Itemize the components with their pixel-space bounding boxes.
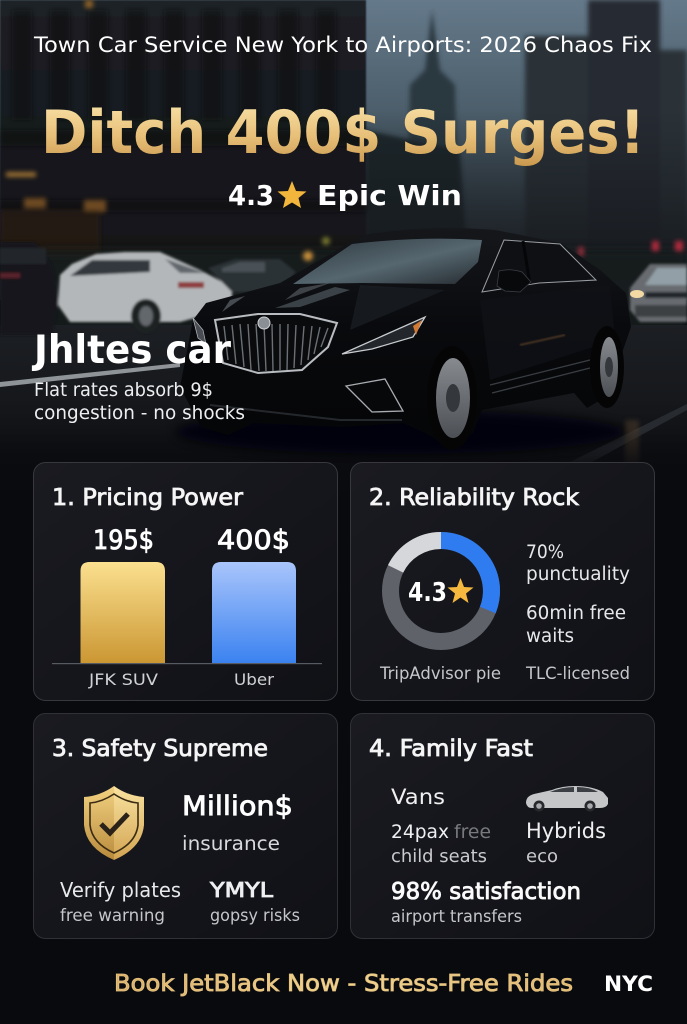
bar chart (52, 525, 322, 689)
vans detail: free (454, 821, 491, 843)
bar chart: JFK SUV (88, 670, 158, 689)
headline: Ditch 400$ Surges! (41, 98, 645, 168)
icon: silver car (526, 786, 608, 812)
chart caption: TripAdvisor pie (379, 664, 501, 683)
background cars (0, 242, 687, 335)
donut chart: 4.3 (408, 578, 447, 608)
YMYL note: gopsy risks (210, 906, 300, 926)
rating subheadline (228, 179, 462, 212)
vans label: Vans (391, 785, 445, 810)
hero description: Flat rates absorb 9$ (34, 379, 213, 401)
reliability stats: 70% (526, 542, 564, 563)
lower bumper (210, 405, 402, 420)
headlight (342, 317, 425, 354)
panel heading: 3. Safety Supreme (52, 736, 268, 762)
reliability stats: waits (526, 626, 574, 647)
vans detail (391, 821, 491, 867)
windshield (293, 239, 482, 284)
verify plates note: free warning (60, 906, 165, 926)
reliability stats: 60min free (526, 603, 626, 624)
YMYL note (209, 878, 300, 926)
panel heading: 2. Reliability Rock (369, 485, 580, 511)
hero car: black sedan (175, 228, 631, 454)
rating subheadline: Epic Win (317, 179, 462, 212)
verify plates note: Verify plates (60, 878, 181, 902)
side windows (482, 240, 596, 292)
panel: pricing power (34, 462, 338, 700)
side mirror (497, 270, 531, 292)
verify plates note (60, 878, 181, 926)
hybrids detail (526, 819, 606, 867)
hero heading: Jhltes car (31, 328, 232, 373)
satisfaction stat (391, 879, 581, 927)
panel: safety supreme (34, 714, 338, 938)
grille (215, 314, 337, 373)
hybrids detail: Hybrids (526, 819, 606, 843)
vans detail: child seats (391, 846, 487, 867)
rear wheel (590, 326, 624, 408)
hybrids detail: eco (526, 846, 558, 867)
title: Town Car Service New York to Airports: 2026 Chaos Fix (33, 33, 652, 57)
satisfaction stat: 98% satisfaction (391, 879, 581, 905)
reliability stats (526, 542, 630, 647)
footer call to action: Book JetBlack Now - Stress-Free Rides (114, 971, 573, 997)
rating subheadline: 4.3 (228, 179, 274, 212)
panel: reliability rock (350, 462, 654, 700)
reliability stats: punctuality (526, 564, 630, 585)
satisfaction stat: airport transfers (391, 907, 522, 927)
donut chart (390, 540, 492, 642)
YMYL note: YMYL (209, 878, 274, 902)
hero description (34, 379, 245, 424)
footer city tag: NYC (604, 972, 653, 996)
front wheel (427, 346, 477, 450)
panel heading: 4. Family Fast (369, 736, 533, 762)
license note: TLC-licensed (525, 664, 630, 683)
hood reflections (275, 287, 350, 308)
panel: family fast (350, 714, 654, 938)
fog lamp trim (346, 379, 403, 412)
panel heading: 1. Pricing Power (52, 485, 244, 511)
vans detail: 24pax (391, 821, 449, 843)
insurance stat: insurance (182, 832, 280, 855)
insurance stat: Million$ (182, 791, 293, 822)
bar chart: 400$ (217, 525, 290, 556)
insurance stat (182, 791, 293, 855)
bar chart: 195$ (93, 525, 154, 556)
bar chart: Uber (234, 670, 274, 689)
icon: gold shield (84, 786, 144, 860)
hero description: congestion - no shocks (34, 402, 245, 424)
